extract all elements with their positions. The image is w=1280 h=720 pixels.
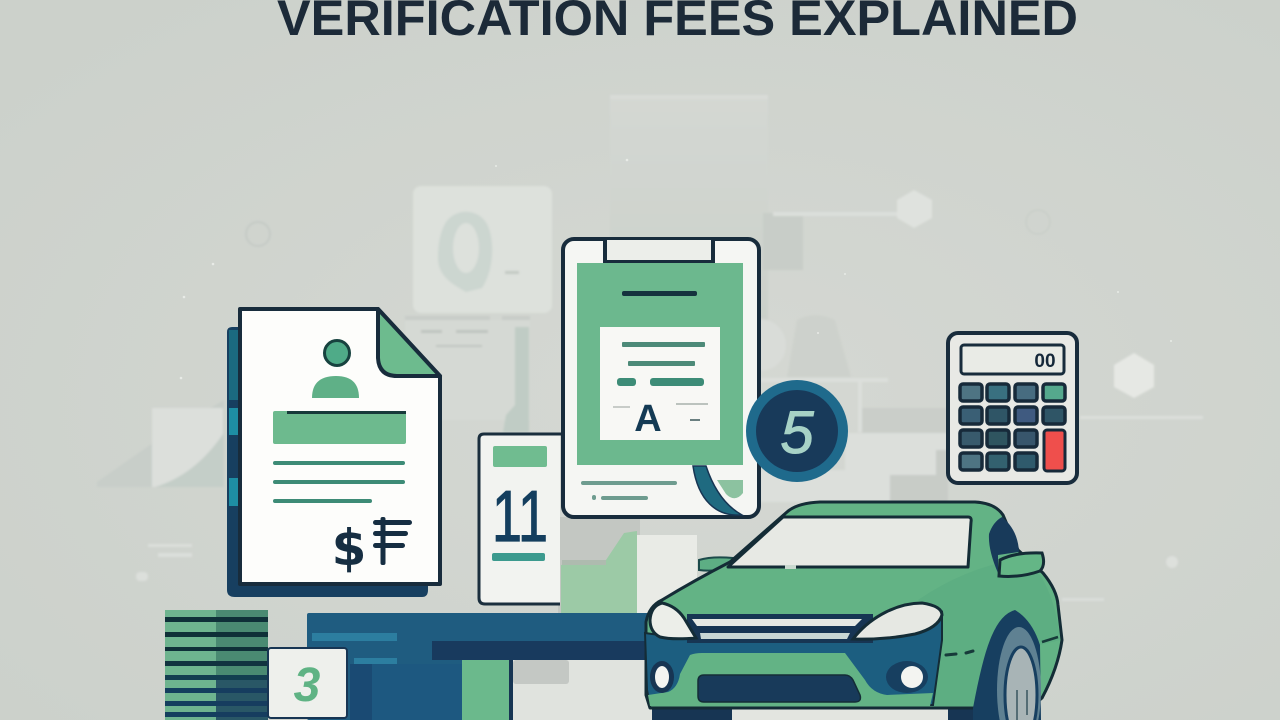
- side window: [989, 517, 1019, 573]
- coin numeral: 5: [780, 399, 814, 466]
- faded background scene: [97, 95, 1203, 601]
- right headlight: [853, 603, 942, 639]
- lower text lines: [581, 481, 677, 500]
- inner sheet: [600, 327, 720, 440]
- under car: [652, 706, 1008, 720]
- keypad: [960, 384, 1065, 470]
- bumper band: [645, 612, 942, 705]
- shadow and green block behind the card: [558, 517, 697, 613]
- front vent: [698, 675, 860, 702]
- document backing: [227, 327, 428, 597]
- grille: [687, 614, 873, 643]
- green panel: [577, 263, 743, 465]
- left fog lamp: [650, 661, 674, 693]
- car body: [646, 502, 1062, 708]
- sparkle dots: [180, 159, 1172, 379]
- clipboard document: [563, 239, 759, 517]
- date number: 11: [492, 477, 548, 557]
- right fog lamp: [886, 661, 928, 693]
- door seam: [946, 651, 973, 655]
- clip: [605, 240, 713, 262]
- rear wheel: [973, 610, 1041, 720]
- red equals key: [1044, 430, 1065, 471]
- display: 00: [1034, 351, 1056, 372]
- heading dash: [622, 291, 697, 296]
- fee symbol: $: [332, 519, 366, 577]
- page curl: [693, 466, 742, 515]
- icon: person: [312, 340, 359, 398]
- body shade: [918, 560, 1060, 706]
- left mirror: [699, 557, 733, 571]
- text lines: [273, 461, 405, 503]
- floor area under desk: [510, 660, 652, 720]
- right mirror: [999, 553, 1044, 576]
- green name bar: [273, 411, 406, 444]
- desk: [307, 613, 652, 720]
- folded corner: [378, 309, 440, 376]
- card glyph: 3: [294, 659, 321, 712]
- left headlight: [650, 603, 696, 639]
- display: [961, 345, 1064, 374]
- desk leg: [462, 660, 513, 720]
- coin: [746, 380, 848, 482]
- calendar card: [479, 433, 562, 604]
- stack of bills: [165, 610, 268, 720]
- small card: [268, 648, 347, 718]
- letter mark: A: [634, 398, 662, 440]
- green car: [645, 502, 1062, 720]
- green tab: [717, 480, 743, 498]
- document sheet: [240, 309, 440, 584]
- windshield: [728, 517, 971, 567]
- calculator: [948, 333, 1077, 483]
- lower bumper: [648, 653, 933, 706]
- identity document: [227, 309, 440, 597]
- fee symbol: [332, 517, 412, 577]
